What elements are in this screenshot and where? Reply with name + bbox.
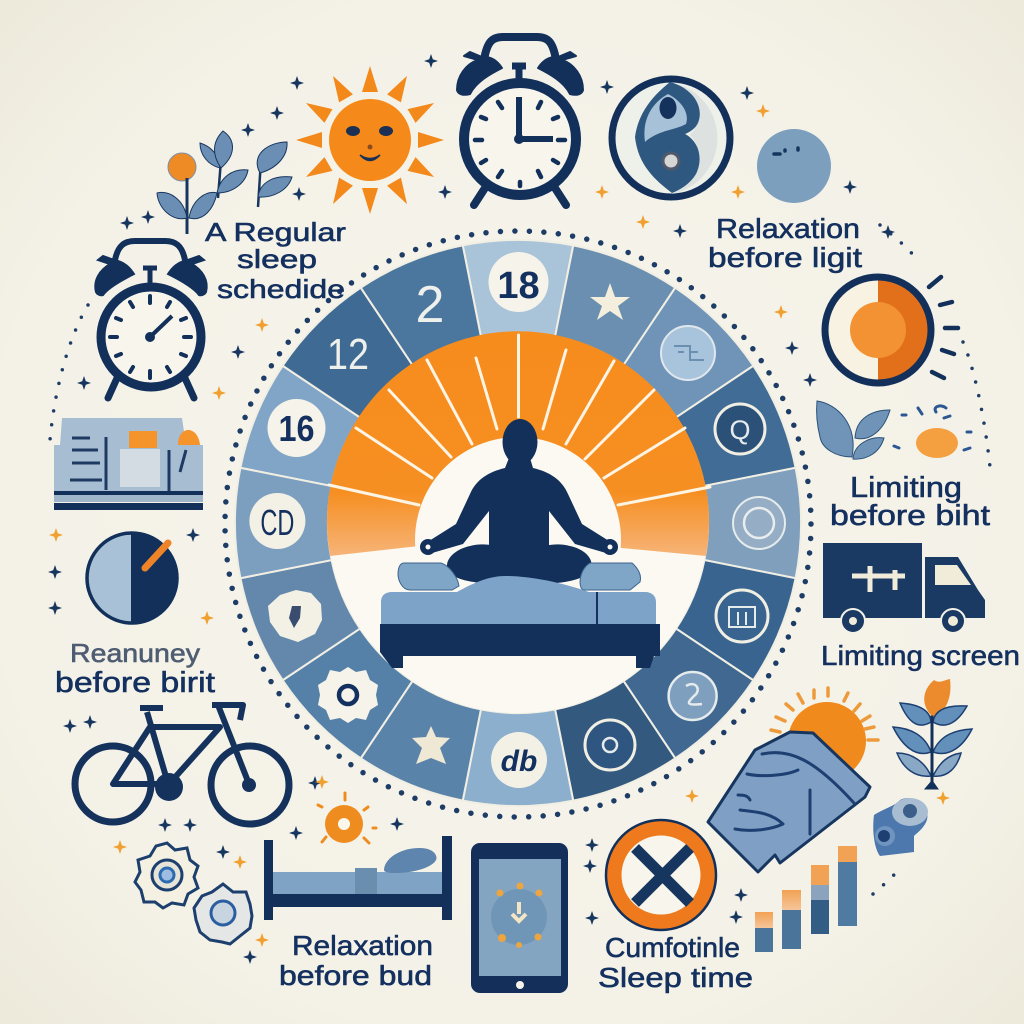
label: reanuney before birit <box>55 638 215 699</box>
sprig three <box>257 142 292 207</box>
Q badge: Q <box>729 415 751 445</box>
outer dotted arcs <box>50 225 990 894</box>
stem <box>925 716 938 789</box>
tablet icon <box>471 843 568 993</box>
crank <box>155 773 183 801</box>
handle <box>115 241 185 260</box>
no symbol <box>606 820 716 930</box>
line 2: before ligit <box>708 242 862 273</box>
left leaf 3 <box>897 753 931 776</box>
x mark <box>635 848 690 903</box>
CD badge: CD <box>260 502 294 543</box>
line 2: Sleep time <box>598 962 753 993</box>
navy stars <box>48 54 895 964</box>
label: limiting screen: Limiting screen <box>821 640 1020 671</box>
lower right leaf <box>853 438 884 459</box>
swirl badge <box>585 720 635 770</box>
rose icon <box>873 798 928 856</box>
blanket band <box>355 868 377 894</box>
book badge <box>661 326 715 380</box>
line 2: before biht <box>830 500 990 532</box>
bed frame <box>380 624 660 668</box>
ticks <box>110 296 191 378</box>
text lines <box>70 438 102 480</box>
bar one <box>755 928 773 952</box>
right leaf 2 <box>933 729 972 753</box>
left leaves <box>900 703 931 725</box>
fan rays <box>329 335 710 505</box>
left pillow <box>398 563 459 590</box>
right hand <box>602 539 618 555</box>
CD badge <box>249 493 305 549</box>
sprig two <box>200 131 248 198</box>
hub <box>242 778 256 792</box>
orange folder <box>129 431 157 448</box>
label: relaxation before bud: Relaxation <box>292 930 433 961</box>
left alarm clock <box>95 241 207 398</box>
star badge <box>590 283 630 320</box>
dark half <box>131 532 177 624</box>
clock ticks <box>475 102 565 186</box>
sun face <box>346 126 393 160</box>
frame rail <box>273 894 442 907</box>
ring rays <box>929 277 958 378</box>
bar chart <box>755 846 857 952</box>
sun rays right <box>771 688 878 740</box>
swirl <box>875 826 895 846</box>
bar two <box>782 910 801 949</box>
yin-yang swirl <box>635 82 700 193</box>
clock handle <box>484 37 556 60</box>
petal <box>892 798 928 826</box>
number 2: 2 <box>416 276 444 334</box>
mattress <box>381 576 656 624</box>
top alarm clock <box>457 37 583 205</box>
screen <box>479 859 561 976</box>
star badge lower left <box>412 726 450 764</box>
clock bells <box>457 52 502 95</box>
cab <box>925 557 985 618</box>
desk shelves <box>54 491 203 495</box>
pale right half <box>670 82 717 194</box>
pillow <box>384 848 436 873</box>
line 2: before birit <box>55 667 215 699</box>
bed <box>380 563 660 668</box>
leaf badge <box>669 672 717 720</box>
number 18 badge: 18 <box>497 265 540 307</box>
ring <box>825 277 931 383</box>
gears <box>135 843 252 944</box>
dial <box>491 889 547 945</box>
gear two center <box>211 901 235 925</box>
pale sheet <box>120 449 160 487</box>
right bell <box>168 256 207 295</box>
clock face <box>101 287 201 387</box>
label: a regular sleep schedule: A Regular <box>205 217 346 247</box>
plus marks <box>852 566 905 592</box>
ring badge <box>733 497 785 549</box>
center <box>338 818 350 830</box>
home button <box>516 981 524 989</box>
front wheel <box>211 746 289 824</box>
label: comfortable sleep time <box>598 932 753 993</box>
orange needle <box>145 543 168 568</box>
bar three <box>811 900 829 934</box>
swirl two <box>903 804 917 818</box>
label: limiting before bed <box>830 472 990 532</box>
light swirl <box>644 94 687 142</box>
hand <box>150 316 172 337</box>
mattress <box>273 872 442 894</box>
pale eye <box>663 153 679 169</box>
right pillow <box>580 563 641 590</box>
dial arrow <box>512 902 526 921</box>
right leaves <box>933 706 967 725</box>
small sun <box>318 793 376 843</box>
sun rays <box>296 66 444 214</box>
blanket <box>708 732 870 872</box>
gear one center <box>152 860 182 890</box>
small bed icon <box>264 836 452 920</box>
rays <box>318 793 376 843</box>
half sun circle <box>825 277 958 383</box>
db badge <box>491 732 547 788</box>
frame <box>113 705 249 787</box>
sprig one <box>157 178 217 234</box>
dark eye <box>660 97 676 119</box>
dial marks <box>496 882 542 948</box>
white sun core <box>415 437 621 643</box>
bicycle icon <box>75 705 289 824</box>
db badge: db <box>501 745 537 778</box>
crossed legs <box>447 544 592 585</box>
number 16 badge <box>268 399 326 457</box>
label: comfortable sleep time: Cumfotinle <box>605 932 740 963</box>
frame badge <box>716 590 768 642</box>
bells <box>95 256 134 295</box>
sun disc <box>329 99 411 181</box>
left hand <box>420 539 436 555</box>
pie chart icon <box>87 532 177 624</box>
sun behind blanket <box>788 702 866 780</box>
flower and leaf sprigs <box>157 131 292 234</box>
truck icon <box>823 543 985 633</box>
plant right <box>893 679 972 789</box>
line 2: sleep <box>237 244 317 274</box>
orange dome <box>178 430 200 445</box>
line 3: schedide <box>217 274 345 304</box>
blob badge <box>268 590 322 642</box>
upper right leaf <box>855 410 890 439</box>
wheels <box>841 609 865 633</box>
window <box>935 565 971 585</box>
orange half <box>878 277 931 383</box>
left leaf 2 <box>893 727 931 753</box>
orange blob with splashes <box>894 406 971 458</box>
orange stars <box>49 104 950 947</box>
sunrise fan <box>327 331 710 643</box>
center disc <box>328 333 708 713</box>
dotted ring <box>225 231 811 817</box>
right bell <box>538 52 583 95</box>
feet <box>108 376 194 398</box>
clock stem <box>512 66 526 82</box>
inner disc <box>850 302 906 358</box>
body <box>427 458 611 553</box>
wheel segments <box>235 240 801 806</box>
leaf icon right <box>817 401 890 459</box>
bar four <box>838 862 857 926</box>
Q badge <box>715 404 765 454</box>
label: relaxation before light <box>708 213 862 273</box>
desk panel icon <box>54 418 203 510</box>
label: relaxation before light: Relaxation <box>716 213 860 244</box>
orange bud <box>924 679 950 718</box>
number 12: 12 <box>327 330 369 379</box>
clock feet <box>474 188 566 205</box>
clock body <box>464 83 576 195</box>
outline <box>606 820 716 930</box>
orange flower <box>168 153 196 181</box>
front wheel <box>941 609 965 633</box>
blue moon circle <box>757 129 831 203</box>
meditating figure <box>420 419 618 585</box>
label: reanuney before birit: Reanuney <box>70 638 200 668</box>
blanket folds <box>735 753 854 834</box>
label: a regular sleep schedule <box>205 217 346 304</box>
yin-yang circle <box>612 79 730 197</box>
number 16 badge: 16 <box>278 408 314 449</box>
line 2: before bud <box>279 960 432 991</box>
dial wheel <box>225 231 811 817</box>
label: limiting before bed: Limiting <box>850 472 962 504</box>
head <box>502 419 538 465</box>
label: relaxation before bud <box>279 930 433 991</box>
moon marks <box>774 148 798 154</box>
right leaf 3 <box>933 753 961 776</box>
splash marks <box>894 406 971 450</box>
scattered stars <box>48 54 950 964</box>
gear two <box>194 884 252 944</box>
sun with face <box>296 66 444 214</box>
O gear badge <box>318 667 378 723</box>
number 18 badge <box>488 252 548 312</box>
clock hands <box>519 97 553 139</box>
